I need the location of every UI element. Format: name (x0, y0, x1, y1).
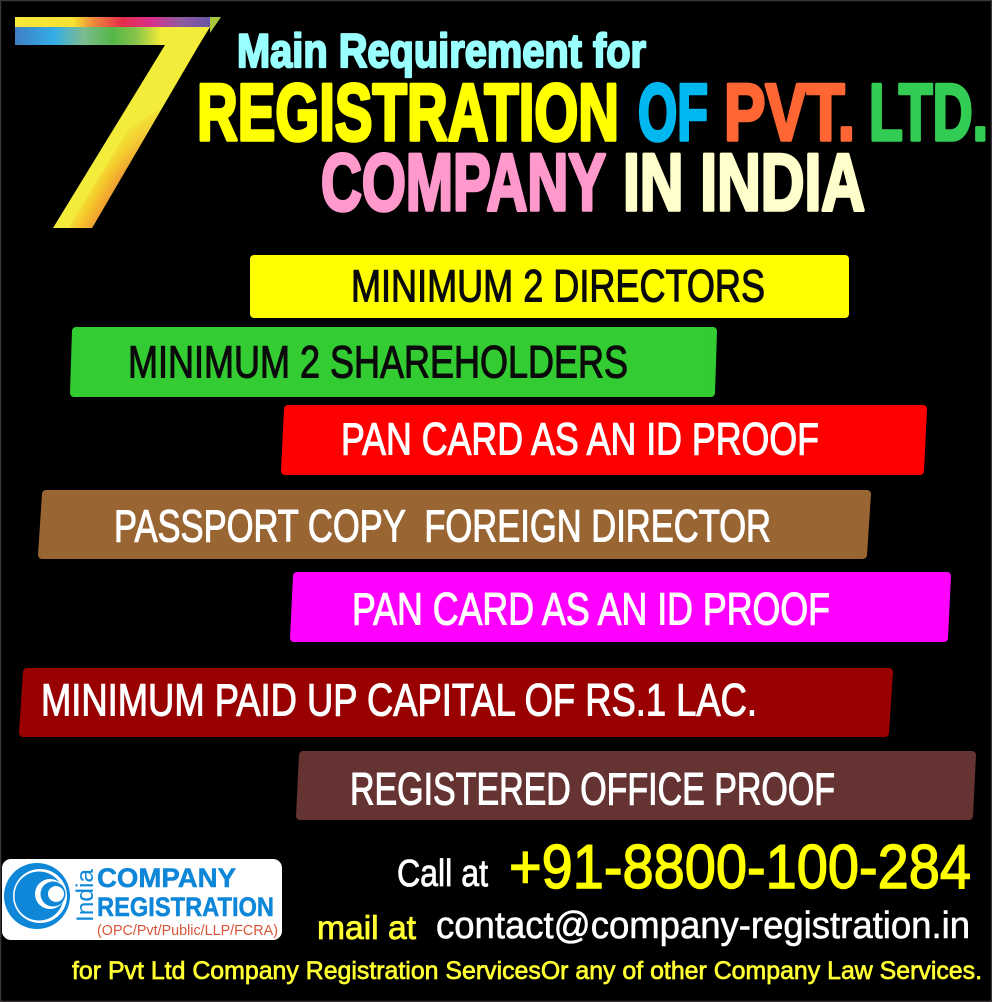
logo: company registration (2, 859, 282, 940)
icon: rainbow number 7 (15, 17, 221, 228)
icon: concentric crescents (4, 863, 70, 929)
footer line: for Pvt Ltd Company Registration ServicesOr any of other Company Law Services. (72, 957, 982, 985)
title word: REGISTRATION: REGISTRATION (197, 68, 619, 158)
logo text: entity types: (OPC/Pvt/Public/LLP/FCRA) (97, 922, 278, 939)
bar: passport copy: PASSPORT COPY FOREIGN DIRECTOR (114, 500, 771, 552)
title words: IN INDIA: IN INDIA (623, 138, 865, 228)
title word: OF: OF (638, 68, 708, 158)
logo text: REGISTRATION: REGISTRATION (97, 892, 274, 922)
bar: passport copy (42, 494, 867, 555)
logo text: India: India (72, 868, 99, 922)
bar: registered office proof: REGISTERED OFFICE PROOF (350, 764, 835, 814)
email address: contact@company-registration.in (436, 905, 970, 947)
bar: pan card magenta: PAN CARD AS AN ID PROOF (352, 584, 830, 634)
bar: minimum paid up capital: MINIMUM PAID UP CAPITAL OF RS.1 LAC. (41, 674, 757, 726)
logo text: COMPANY: COMPANY (97, 863, 236, 893)
title line 1: Main Requirement for (237, 24, 646, 77)
bar: minimum 2 directors: MINIMUM 2 DIRECTORS (351, 260, 765, 312)
bar: pan card red: PAN CARD AS AN ID PROOF (341, 414, 819, 464)
bar: minimum 2 shareholders: MINIMUM 2 SHAREHOLDERS (128, 336, 628, 388)
title word: COMPANY: COMPANY (321, 138, 606, 228)
mail label: mail at (317, 909, 416, 946)
call label: Call at (397, 853, 488, 895)
title word: PVT.: PVT. (724, 68, 855, 158)
title (197, 24, 988, 228)
